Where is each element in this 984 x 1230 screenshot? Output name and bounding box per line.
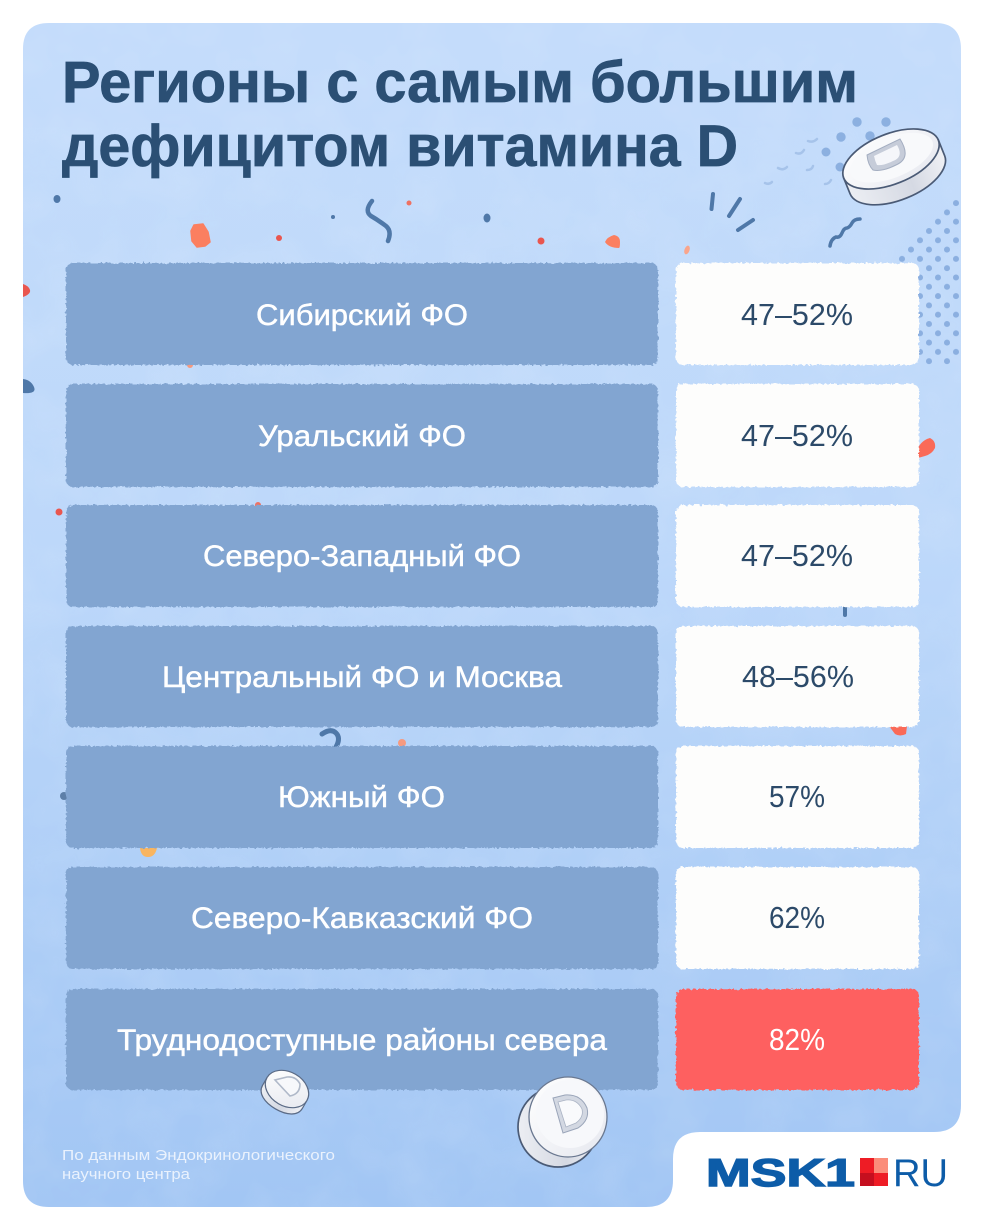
source note: научного центра <box>62 1166 191 1183</box>
title: Регионы с самым большим <box>62 50 858 115</box>
row: Северо-Кавказский ФО: 62% <box>769 900 825 935</box>
row: Южный ФО <box>66 746 919 848</box>
row: Уральский ФО <box>66 384 919 487</box>
row: Уральский ФО: 47–52% <box>741 418 853 453</box>
row: Труднодоступные районы севера <box>66 989 919 1090</box>
icon: top pill <box>834 117 954 217</box>
row: Центральный ФО и Москва: Центральный ФО и Москва <box>162 661 562 694</box>
row: Северо-Западный ФО: 47–52% <box>741 538 853 573</box>
row: Уральский ФО: Уральский ФО <box>258 420 466 453</box>
row: Северо-Кавказский ФО: Северо-Кавказский ФО <box>191 902 533 935</box>
logo: MSK1.RU: RU <box>893 1152 948 1195</box>
row: Труднодоступные районы севера: 82% <box>769 1022 825 1057</box>
logo: MSK1.RU: MSK1 <box>706 1152 855 1195</box>
row: Сибирский ФО <box>66 263 919 365</box>
row: Центральный ФО и Москва <box>66 626 919 727</box>
row: Южный ФО: Южный ФО <box>278 781 445 814</box>
source note <box>62 1147 335 1183</box>
source note: По данным Эндокринологического <box>62 1147 335 1164</box>
icon: large pill <box>518 1077 607 1167</box>
row: Сибирский ФО: Сибирский ФО <box>256 299 468 332</box>
confetti and decorative background shapes <box>23 117 959 857</box>
row: Центральный ФО и Москва: 48–56% <box>742 659 854 694</box>
row: Северо-Западный ФО <box>66 505 919 607</box>
title <box>62 50 858 179</box>
row: Труднодоступные районы севера: Труднодоступные районы севера <box>117 1024 607 1057</box>
row: Южный ФО: 57% <box>769 779 825 814</box>
icon: small pill <box>256 1063 315 1120</box>
row: Северо-Западный ФО: Северо-Западный ФО <box>203 540 521 573</box>
row: Сибирский ФО: 47–52% <box>741 297 853 332</box>
row: Северо-Кавказский ФО <box>66 867 919 969</box>
logo: MSK1.RU <box>706 1152 948 1195</box>
title: дефицитом витамина D <box>62 114 738 179</box>
